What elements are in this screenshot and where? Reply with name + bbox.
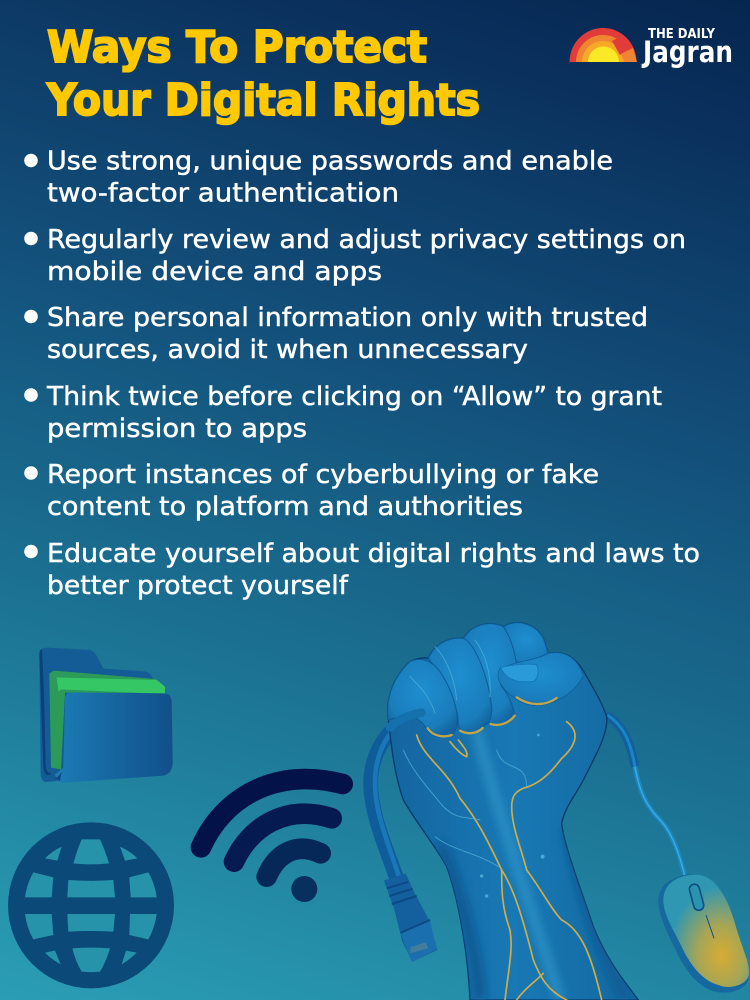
icon: folder [39, 648, 173, 783]
forearm and palm [388, 623, 638, 1000]
title: Ways To Protect [47, 22, 427, 73]
logo wordmark: THE DAILY [648, 26, 715, 42]
bullet 1: two-factor authentication [47, 178, 399, 208]
icon: globe [8, 822, 174, 988]
bullet 2 [24, 225, 686, 287]
bullet list [24, 146, 700, 601]
title [46, 22, 480, 126]
bullet 4: Think twice before clicking on “Allow” to grant [46, 382, 662, 412]
bullet 5 [24, 460, 599, 522]
bullet 2: Regularly review and adjust privacy settings on [47, 225, 686, 255]
bullet 3: sources, avoid it when unnecessary [47, 335, 528, 365]
ethernet cable [371, 716, 437, 962]
pale blue veins [403, 640, 527, 867]
soft highlights on the arm [440, 730, 627, 1000]
bullet 5: Report instances of cyberbullying or fake [47, 460, 599, 490]
logo wordmark: Jagran [641, 35, 733, 69]
bullet 3 [24, 303, 648, 365]
bullet 1: Use strong, unique passwords and enable [47, 146, 613, 176]
bullet 3: Share personal information only with trusted [47, 303, 648, 333]
bullet 5: content to platform and authorities [47, 492, 523, 522]
illustration: fist with cable and mouse [371, 623, 749, 1000]
cable crossing the palm [390, 713, 422, 727]
title: Your Digital Rights [46, 75, 480, 126]
gold finger edges [428, 697, 557, 736]
bullet 1 [24, 146, 613, 208]
icon: sunrise logo mark [570, 28, 637, 62]
bullet 4: permission to apps [47, 414, 307, 444]
gold veins [417, 722, 602, 1000]
thumb [498, 653, 583, 706]
computer mouse [658, 874, 749, 993]
logo: The Daily Jagran [570, 26, 733, 69]
fingers [388, 623, 548, 737]
bullet 4 [24, 382, 662, 444]
bullet 6: Educate yourself about digital rights and laws to [47, 539, 700, 569]
mouse cable [606, 715, 685, 877]
thumbnail [501, 664, 538, 682]
bullet 2: mobile device and apps [47, 257, 382, 287]
glow dots on the arm [480, 734, 545, 898]
bullet 6 [24, 539, 700, 601]
bullet 6: better protect yourself [47, 571, 349, 601]
logo wordmark [641, 26, 733, 69]
icon: wifi [201, 779, 343, 902]
